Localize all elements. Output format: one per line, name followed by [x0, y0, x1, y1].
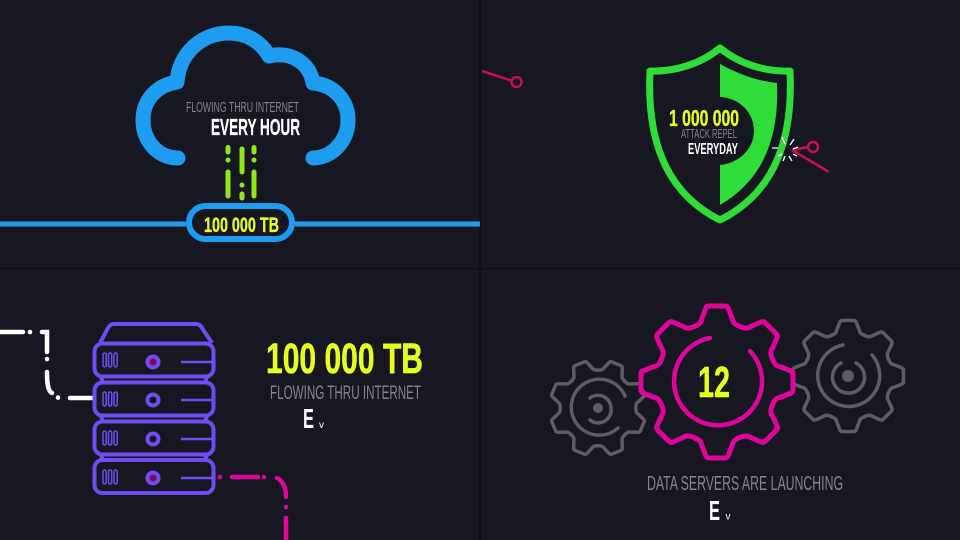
- text: 100 000 TB: 100 000 TB: [204, 214, 279, 237]
- network line: [0, 222, 480, 226]
- text: attack repel: ATTACK REPEL: [681, 127, 737, 141]
- text: every hour: EVERY HOUR: [211, 114, 300, 140]
- panel: gears: [535, 306, 903, 526]
- icon: left grey gear: [535, 345, 661, 471]
- icon: right grey gear: [793, 321, 903, 431]
- panel: shield security: [482, 48, 829, 220]
- text: 12: 12: [698, 358, 730, 407]
- panel: cloud internet traffic: [0, 33, 480, 239]
- text: partial heading: v: [319, 420, 324, 431]
- text: partial heading: E: [709, 495, 720, 526]
- text: partial heading: v: [726, 512, 730, 522]
- text: 1 000 000: 1 000 000: [669, 105, 739, 131]
- text: flowing thru internet: FLOWING THRU INTERNET: [270, 382, 421, 404]
- attack arrow top left: [482, 71, 522, 87]
- text: 100 000 TB: 100 000 TB: [266, 335, 423, 383]
- text: everyday: EVERYDAY: [688, 141, 738, 158]
- icon: pink gear: [641, 306, 793, 458]
- text: flowing thru internet: FLOWING THRU INTERNET: [186, 99, 299, 116]
- white connector line: [0, 332, 92, 398]
- pill: data amount: [189, 206, 292, 239]
- icon: server stack: [94, 324, 214, 493]
- impact sparks: [772, 137, 798, 161]
- icon: shield: [650, 48, 790, 220]
- panel: servers: [0, 324, 423, 540]
- attack arrow hitting shield: [792, 142, 829, 172]
- pink connector line: [220, 477, 286, 540]
- icon: cloud: [143, 33, 348, 158]
- data stream dashes: [228, 148, 254, 198]
- text: partial heading: E: [303, 403, 314, 434]
